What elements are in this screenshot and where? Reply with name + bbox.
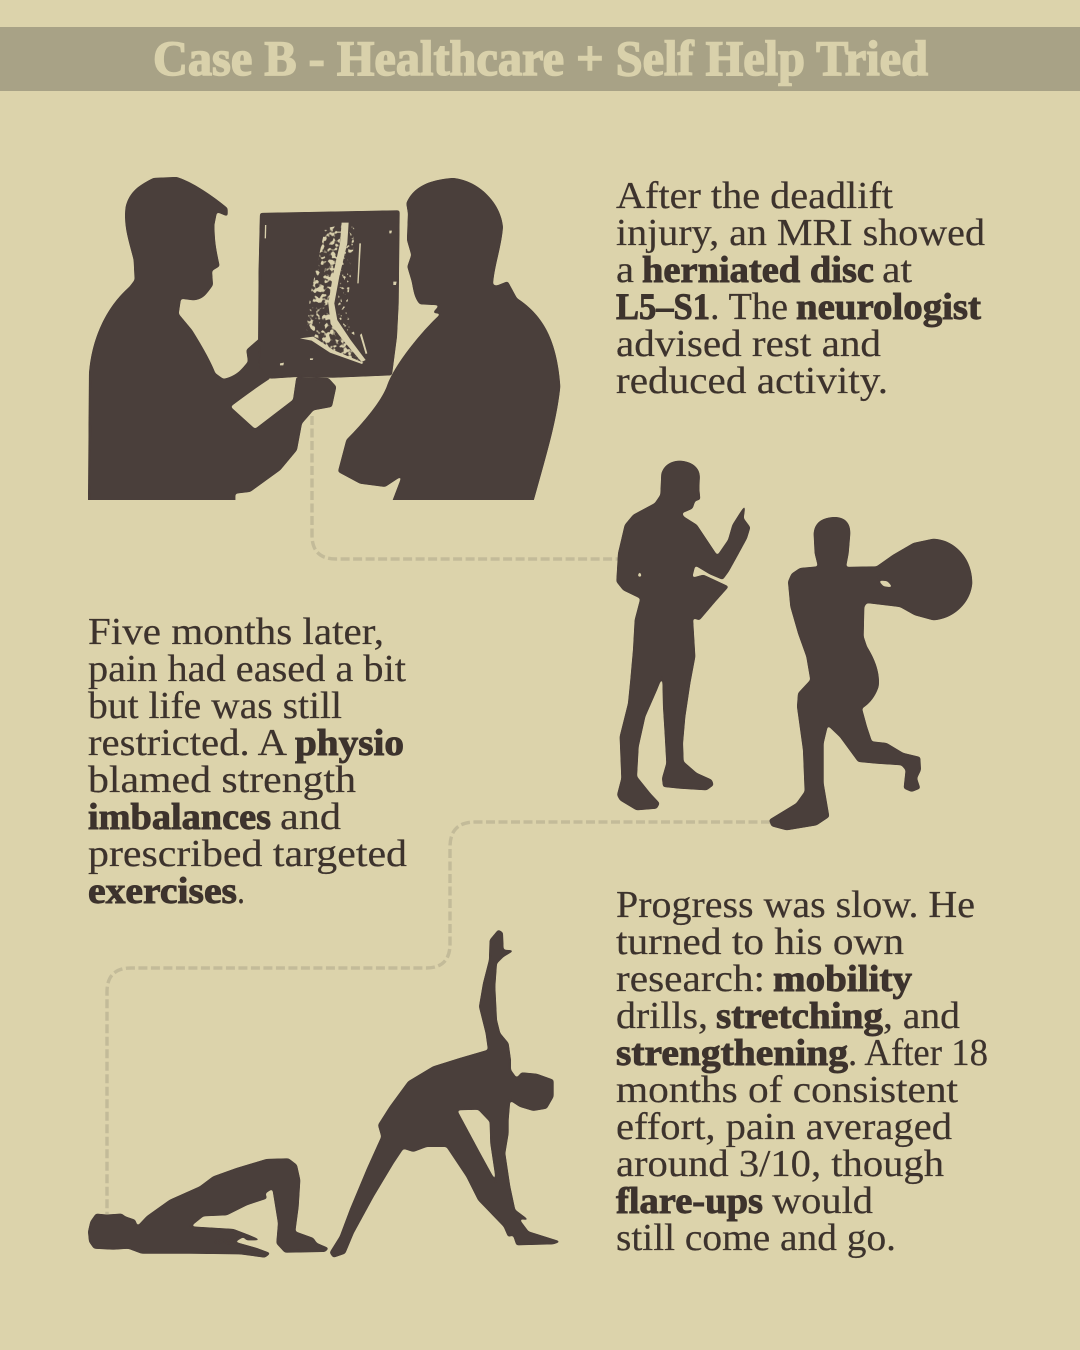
- text block: self-directed progress: . After 18: [848, 1032, 988, 1074]
- title banner: [0, 27, 1080, 91]
- text block: MRI and neurologist advice: After the deadlift: [616, 175, 893, 217]
- text block: physio diagnosis: blamed strength: [88, 759, 356, 801]
- text block: physio diagnosis: but life was still: [88, 685, 342, 727]
- text block: MRI and neurologist advice: advised rest and: [616, 323, 881, 365]
- text block: physio diagnosis: and: [280, 796, 341, 838]
- text block: self-directed progress: effort, pain averaged: [616, 1106, 952, 1148]
- text block: self-directed progress: mobility: [773, 959, 913, 1000]
- dashed connector: physio to self help: [107, 822, 770, 1214]
- text block: MRI and neurologist advice: [616, 175, 985, 402]
- text block: MRI and neurologist advice: a: [616, 249, 634, 291]
- illustration: doctor and patient reviewing MRI: [88, 177, 560, 510]
- text block: physio diagnosis: pain had eased a bit: [88, 648, 406, 690]
- text block: self-directed progress: flare-ups: [616, 1181, 763, 1222]
- text block: self-directed progress: strengthening: [616, 1033, 849, 1074]
- text block: MRI and neurologist advice: injury, an MRI showed: [616, 212, 985, 254]
- text block: self-directed progress: stretching: [716, 996, 884, 1037]
- illustration: bridge and triangle pose stretches: [88, 930, 560, 1257]
- text block: self-directed progress: still come and go.: [616, 1217, 896, 1259]
- text block: physio diagnosis: physio: [295, 723, 404, 764]
- text block: physio diagnosis: imbalances: [88, 797, 271, 838]
- text block: physio diagnosis: prescribed targeted: [88, 833, 407, 875]
- text block: physio diagnosis: Five months later,: [88, 611, 384, 653]
- text block: self-directed progress: Progress was slow. He: [616, 884, 975, 926]
- MRI spine detail: [265, 223, 397, 365]
- text block: self-directed progress: around 3/10, though: [616, 1143, 944, 1185]
- text block: self-directed progress: months of consistent: [616, 1069, 958, 1111]
- text block: physio diagnosis: restricted. A: [88, 722, 288, 764]
- text block: physio diagnosis: .: [237, 870, 245, 912]
- text block: self-directed progress: , and: [883, 995, 960, 1037]
- text block: self-directed progress: research:: [616, 958, 765, 1000]
- dashed connector: consultation to physio: [312, 416, 620, 559]
- text block: MRI and neurologist advice: reduced activity.: [616, 360, 888, 402]
- text block: self-directed progress: drills,: [616, 995, 708, 1037]
- title banner: Case B - Healthcare + Self Help Tried: [153, 30, 928, 86]
- text block: self-directed progress: would: [772, 1180, 873, 1222]
- illustration: physio instructing patient with exercise ball: [617, 461, 972, 830]
- text block: self-directed progress: [616, 884, 988, 1259]
- text block: MRI and neurologist advice: at: [882, 249, 912, 291]
- text block: MRI and neurologist advice: . The: [710, 286, 788, 328]
- text block: self-directed progress: turned to his own: [616, 921, 904, 963]
- text block: MRI and neurologist advice: neurologist: [796, 287, 982, 328]
- text block: physio diagnosis: exercises: [88, 871, 237, 912]
- text block: MRI and neurologist advice: L5–S1: [616, 287, 710, 328]
- text block: MRI and neurologist advice: herniated disc: [642, 250, 874, 291]
- text block: physio diagnosis: [88, 611, 407, 912]
